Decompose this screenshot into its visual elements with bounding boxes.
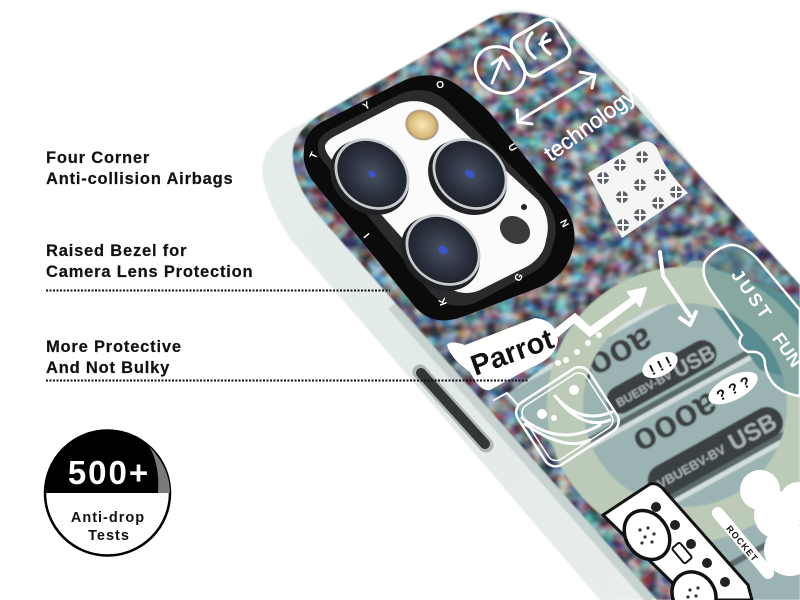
doodle: banana box <box>494 363 623 471</box>
battery rows <box>514 304 800 567</box>
doodle: double arrow <box>517 72 595 124</box>
badge number: 500+ <box>68 454 150 491</box>
lidar sensor <box>494 210 536 250</box>
camera plate <box>325 101 548 293</box>
pill USB 2: BVBUEBV-BV <box>646 441 728 496</box>
pill USB 2 <box>647 406 784 495</box>
badge caption: Anti-drop <box>71 510 145 526</box>
doodle: rocket pill <box>709 505 777 581</box>
doodle: zigzag arrow <box>555 288 646 336</box>
island lettering: O <box>435 79 445 92</box>
case bumper <box>262 10 800 600</box>
island lettering: K <box>437 295 450 307</box>
island outer frame <box>304 75 575 320</box>
question bubble: ? ? ? <box>714 374 754 405</box>
phone case illustration <box>260 0 800 600</box>
perforation dots <box>597 151 682 231</box>
pill USB 1 <box>606 339 718 414</box>
question bubble <box>703 365 763 411</box>
doodle: CE box <box>508 16 573 79</box>
battery label row 2: aooo <box>626 383 726 464</box>
printed back texture <box>260 0 800 600</box>
parrot speech bubble <box>447 318 558 390</box>
label: more protective: And Not Bulky <box>46 359 170 377</box>
doodle: technology text: technology <box>539 83 640 166</box>
side button <box>420 372 486 445</box>
island lettering: Y <box>361 100 373 113</box>
island lettering: U <box>505 142 518 154</box>
doodle: just fun box: JUST <box>727 266 777 324</box>
badge caption: Tests <box>88 528 130 544</box>
island lettering: T <box>308 151 321 161</box>
flash <box>400 104 444 146</box>
label: raised bezel: Camera Lens Protection <box>46 263 253 281</box>
parrot speech bubble: Parrot <box>467 323 558 383</box>
label: four corner airbags: Anti-collision Airbags <box>46 170 234 188</box>
dotted leader: protection <box>46 380 528 382</box>
pill USB 1: BUEBV-BV <box>614 368 675 410</box>
lens left <box>315 122 425 231</box>
label: raised bezel: Raised Bezel for <box>46 242 187 260</box>
badge highlight <box>149 446 170 493</box>
doodle: boombox radio <box>603 484 752 600</box>
label: more protective: More Protective <box>46 338 182 356</box>
battery panel <box>504 260 800 600</box>
label: four corner airbags: Four Corner <box>46 149 150 167</box>
doodle: down arrow <box>660 252 696 325</box>
camera island <box>304 75 575 320</box>
bumper inner shade <box>393 305 652 600</box>
battery label row 1: aooo <box>561 318 661 399</box>
pill USB 2: USB <box>724 408 782 456</box>
island lettering: G <box>513 271 526 284</box>
doodle: perforated tag <box>588 141 688 238</box>
doodle: rocket pill: ROCKET <box>724 524 760 564</box>
exclamation bubble: ! ! ! <box>646 353 675 379</box>
doodle: white cloud <box>740 470 800 576</box>
island lettering: N <box>557 218 570 230</box>
island inner bevel <box>318 90 556 306</box>
pale green ring <box>565 285 800 525</box>
dots trail <box>537 332 602 421</box>
badge: 500+ anti-drop tests <box>45 430 170 556</box>
island lettering <box>308 79 570 307</box>
doodle: just fun box <box>704 245 800 396</box>
island lettering: I <box>362 230 372 240</box>
dotted leader: camera <box>46 290 390 292</box>
lens bottom <box>386 198 496 307</box>
lens right <box>413 122 523 231</box>
exclamation bubble <box>638 347 682 383</box>
teal corner block <box>712 268 800 376</box>
doodle: arrow circle logo <box>466 37 534 103</box>
microphone dot <box>521 204 527 210</box>
pill USB 1: USB <box>669 341 719 382</box>
